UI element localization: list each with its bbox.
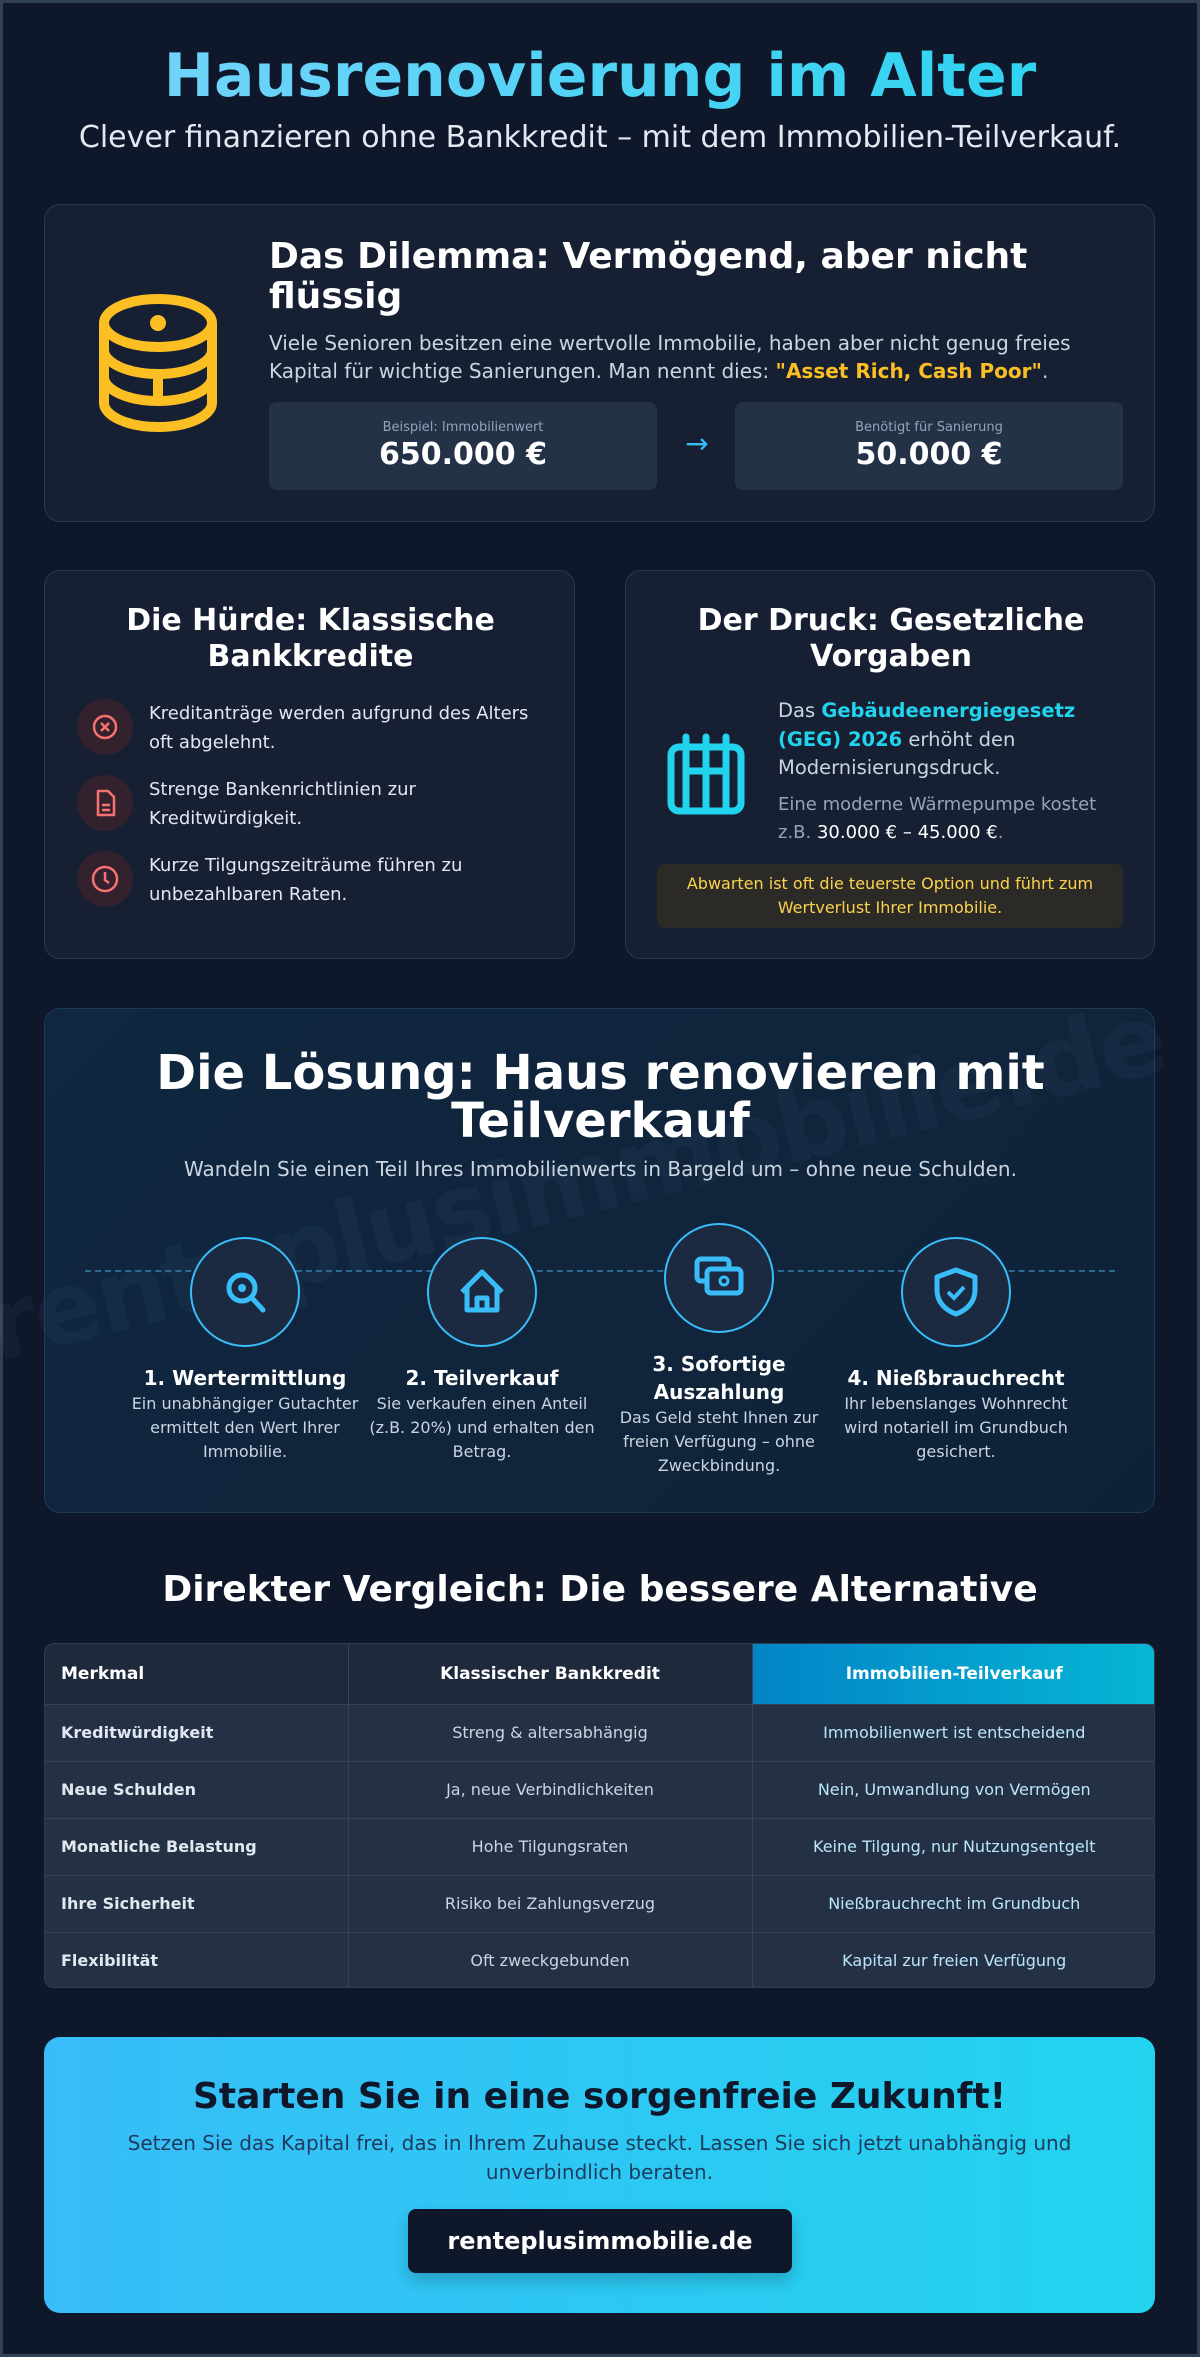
panel: pressure [625, 570, 1155, 959]
comparison table: Monatliche Belastung [61, 1837, 257, 1856]
list item 3: Kurze Tilgungszeiträume führen zu unbezahlbaren Raten. [149, 855, 462, 905]
button: website: renteplusimmobilie.de [447, 2227, 753, 2255]
step 4 [844, 1237, 1068, 1461]
step 2 [369, 1237, 595, 1461]
box: renovation need: Benötigt für Sanierung [855, 420, 1003, 435]
box: renovation need: 50.000 € [855, 437, 1003, 472]
dashed line [85, 1270, 1115, 1272]
button: website [408, 2209, 792, 2273]
comparison table: Klassischer Bankkredit [440, 1664, 660, 1684]
step 4: 4. Nießbrauchrecht [847, 1366, 1065, 1390]
title [0, 36, 1200, 116]
title: Hausrenovierung im Alter [164, 41, 1036, 111]
step 1: 1. Wertermittlung [144, 1366, 346, 1390]
step 1: Ein unabhängiger Gutachter ermittelt den Wert Ihrer Immobilie. [132, 1394, 358, 1461]
heading: cta: Starten Sie in eine sorgenfreie Zukunft! [193, 2076, 1006, 2117]
step 3: 3. Sofortige [652, 1352, 786, 1376]
text: GEG: Das Gebäudeenergiegesetz (GEG) 2026 erhöht den Modernisierungsdruck. [778, 699, 1075, 779]
heading: pressure [698, 603, 1084, 674]
heading: solution: Teilverkauf [451, 1093, 750, 1149]
comparison table: Hohe Tilgungsraten [472, 1837, 628, 1856]
icon: coins [99, 294, 217, 432]
step 4: Ihr lebenslanges Wohnrecht wird notariell im Grundbuch gesichert. [844, 1394, 1068, 1461]
comparison table: Ja, neue Verbindlichkeiten [446, 1780, 654, 1799]
comparison table: Risiko bei Zahlungsverzug [445, 1894, 655, 1913]
subtitle: solution: Wandeln Sie einen Teil Ihres Immobilienwerts in Bargeld um – ohne neue Schulden. [184, 1157, 1017, 1181]
comparison table: Kapital zur freien Verfügung [842, 1951, 1066, 1970]
heading: pressure: Der Druck: Gesetzliche [698, 603, 1084, 638]
heading: pressure: Vorgaben [810, 639, 972, 674]
panel: hurdle [44, 570, 575, 959]
comparison table: Immobilienwert ist entscheidend [823, 1723, 1085, 1742]
step 1 [132, 1237, 358, 1461]
subtitle: Clever finanzieren ohne Bankkredit – mit dem Immobilien-Teilverkauf. [79, 120, 1121, 155]
heading: dilemma: Das Dilemma: Vermögend, aber nicht flüssig [269, 236, 1027, 317]
callout: warning [657, 864, 1123, 928]
heading: hurdle [126, 603, 495, 674]
text: dilemma: Viele Senioren besitzen eine wertvolle Immobilie, haben aber nicht genug freies Kapital für wichtige Sanierungen. Man nennt dies: "Asset Rich, Cash Poor". [269, 331, 1071, 383]
step 3: Auszahlung [654, 1380, 784, 1404]
step 2: 2. Teilverkauf [406, 1366, 558, 1390]
callout: warning: Abwarten ist oft die teuerste Option und führt zum Wertverlust Ihrer Immobilie. [687, 874, 1093, 917]
heading: hurdle: Bankkredite [208, 639, 413, 674]
comparison table: Nein, Umwandlung von Vermögen [818, 1780, 1091, 1799]
comparison table: Nießbrauchrecht im Grundbuch [828, 1894, 1080, 1913]
step 3: Das Geld steht Ihnen zur freien Verfügung – ohne Zweckbindung. [620, 1408, 818, 1475]
comparison table [44, 1643, 1155, 1988]
comparison table: Oft zweckgebunden [470, 1951, 630, 1970]
step 3 [620, 1223, 818, 1475]
heading: hurdle: Die Hürde: Klassische [126, 603, 495, 638]
box: property value: Beispiel: Immobilienwert [383, 420, 543, 435]
list item 1: Kreditanträge werden aufgrund des Alters oft abgelehnt. [149, 703, 528, 753]
box: property value [269, 402, 657, 490]
heading: comparison: Direkter Vergleich: Die bessere Alternative [162, 1569, 1038, 1610]
watermark: renteplusimmobilie.de [0, 979, 1176, 1385]
comparison table: Kreditwürdigkeit [61, 1723, 213, 1742]
comparison table: Keine Tilgung, nur Nutzungsentgelt [813, 1837, 1095, 1856]
comparison table: Streng & altersabhängig [452, 1723, 648, 1742]
box: property value: 650.000 € [379, 437, 547, 472]
comparison table: Neue Schulden [61, 1780, 196, 1799]
panel: call to action [44, 2037, 1155, 2313]
icon: heat pump [668, 734, 744, 814]
comparison table: Flexibilität [61, 1951, 158, 1970]
arrow: → [685, 427, 709, 460]
comparison table: Merkmal [61, 1664, 144, 1684]
box: renovation need [735, 402, 1123, 490]
comparison table: Immobilien-Teilverkauf [846, 1664, 1063, 1684]
text: heat pump cost: Eine moderne Wärmepumpe kostet z.B. 30.000 € – 45.000 €. [778, 794, 1096, 843]
heading: solution: Die Lösung: Haus renovieren mit [156, 1045, 1045, 1101]
heading: solution [156, 1045, 1045, 1149]
comparison table: Ihre Sicherheit [61, 1894, 195, 1913]
step 2: Sie verkaufen einen Anteil (z.B. 20%) und erhalten den Betrag. [369, 1394, 595, 1461]
panel: dilemma [44, 204, 1155, 522]
text: cta: Setzen Sie das Kapital frei, das in Ihrem Zuhause steckt. Lassen Sie sich jetzt unabhängig und unverbindlich beraten. [128, 2131, 1071, 2184]
panel: solution [44, 1008, 1155, 1513]
list item 2: Strenge Bankenrichtlinien zur Kreditwürdigkeit. [149, 779, 416, 829]
